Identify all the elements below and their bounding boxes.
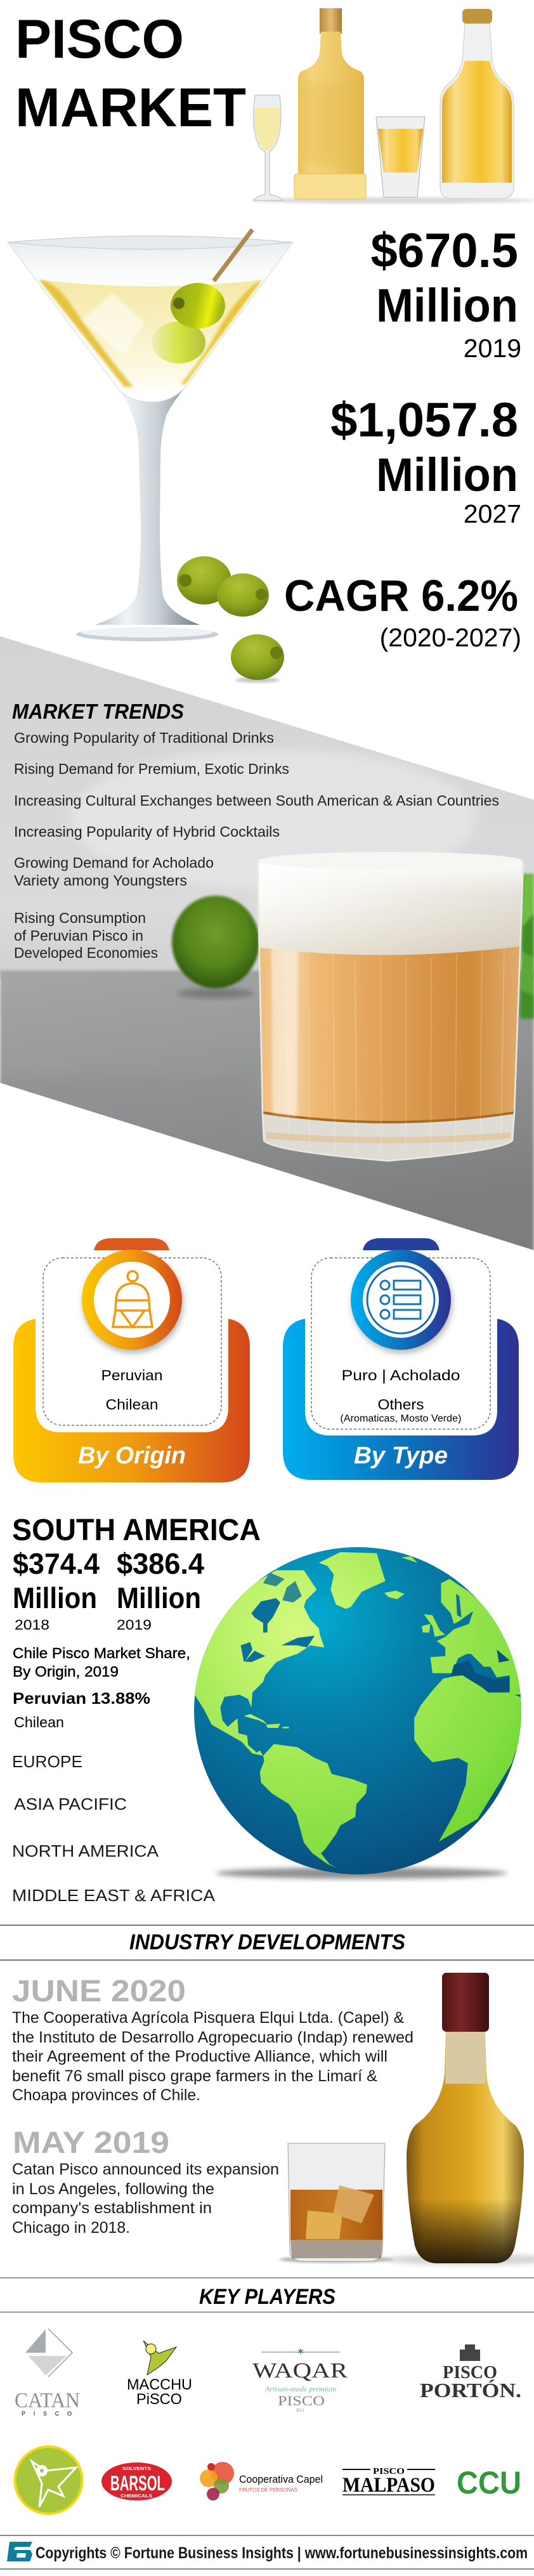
logo: Waqar Pisco: WAQAR — [252, 2359, 348, 2383]
text block: June 2020: JUNE 2020 — [12, 1975, 186, 2008]
logo: Catan Pisco: PISCO — [22, 2410, 72, 2417]
text block: May 2019: company's establishment in — [12, 2199, 212, 2217]
title: PISCO — [15, 9, 184, 70]
list: other regions: MIDDLE EAST & AFRICA — [12, 1886, 216, 1905]
list: market trends: Increasing Cultural Exchanges between South American & Asian Countries — [14, 792, 499, 809]
stat: market size 2027: Million — [376, 448, 518, 501]
stat: south america 2018: $374.4 — [13, 1547, 100, 1580]
icon: square tequila bottle — [294, 8, 366, 199]
logo: Macchu Pisco — [127, 2341, 192, 2408]
icon: green leaves — [520, 874, 534, 1019]
text: origin segments: Peruvian — [101, 1367, 162, 1383]
text block: June 2020: Choapa provinces of Chile. — [12, 2086, 200, 2104]
logo: Cooperativa Capel — [200, 2462, 323, 2501]
panel: market trends photo band — [0, 636, 534, 1253]
text: origin segments — [101, 1367, 162, 1413]
stat: south america 2019: 2019 — [117, 1617, 152, 1633]
text: chile market share: Chilean — [14, 1714, 64, 1730]
panel: by origin — [13, 1238, 250, 1482]
logo: Waqar Pisco: ✶ — [296, 2346, 305, 2358]
list: other regions: ASIA PACIFIC — [14, 1795, 127, 1814]
list: other regions — [12, 1752, 216, 1905]
logo: Barsol: SOLVENTS — [122, 2467, 151, 2471]
icon: whisky glass — [279, 2143, 393, 2263]
list: market trends: Variety among Youngsters — [14, 872, 187, 889]
list: market trends: Developed Economies — [14, 945, 158, 961]
stat: market size 2027: $1,057.8 — [330, 393, 518, 447]
logo: Cooperativa Capel: FRUTOS DE PERSONAS — [239, 2487, 297, 2493]
text block: June 2020: their Agreement of the Productive Alliance, which will — [12, 2048, 387, 2065]
logo: Pisco Porton — [420, 2344, 521, 2402]
icon: olive in glass — [171, 283, 225, 329]
text block: June 2020: benefit 76 small pisco grape farmers in the Limarí & — [12, 2067, 377, 2085]
logo: Catan Pisco: CATAN — [15, 2389, 80, 2412]
stat: market size 2019: 2019 — [464, 334, 521, 363]
logo: Barsol: CHEMICALS — [120, 2494, 152, 2499]
stat: market size 2019 — [371, 224, 521, 363]
logo: Pisco Porton: PORTÓN. — [420, 2379, 521, 2402]
stat: south america 2018 — [13, 1547, 100, 1633]
stat: market size 2027 — [330, 393, 521, 528]
stat: CAGR: (2020-2027) — [380, 623, 521, 652]
label: by type: By Type — [354, 1442, 448, 1469]
icon: champagne flute — [254, 95, 283, 200]
text block: May 2019 — [12, 2126, 279, 2237]
logo: Catan Pisco — [15, 2329, 80, 2417]
icon: olives on table — [177, 556, 284, 683]
logo: Waqar Pisco: PISCO — [278, 2393, 325, 2409]
logo: Cooperativa Capel: Cooperativa Capel — [239, 2473, 323, 2485]
icon: round bottle — [440, 9, 514, 199]
title: MARKET — [15, 77, 246, 138]
logo: Macchu Pisco: MACCHU — [127, 2376, 192, 2393]
list: market trends: Growing Demand for Acholado — [14, 854, 214, 871]
logo: Waqar Pisco: D.O. — [296, 2408, 305, 2413]
text: chile market share: By Origin, 2019 — [13, 1663, 119, 1680]
stat: market size 2027: 2027 — [464, 499, 521, 528]
label: by origin: By Origin — [78, 1442, 186, 1469]
logo: bird emblem — [15, 2447, 82, 2514]
logo: Barsol — [101, 2462, 172, 2501]
stat: CAGR: CAGR 6.2% — [284, 571, 518, 620]
illustration: bottles and glasses — [251, 8, 534, 204]
logo: Pisco Malpaso: MALPASO — [342, 2474, 435, 2497]
heading: key players: KEY PLAYERS — [199, 2285, 335, 2309]
icon: whisky bottle — [387, 1973, 534, 2265]
footer — [0, 2535, 534, 2569]
logo: Macchu Pisco: PiSCO — [136, 2391, 182, 2408]
stat: market size 2019: $670.5 — [371, 224, 518, 278]
logo: Pisco Porton: PISCO — [443, 2363, 497, 2383]
logo: Pisco Malpaso: PISCO — [373, 2467, 405, 2476]
list: market trends: of Peruvian Pisco in — [14, 927, 143, 944]
list: market trends: Rising Consumption — [14, 910, 146, 926]
stat: market size 2019: Million — [376, 279, 518, 332]
logo: Barsol: BARSOL — [110, 2471, 165, 2495]
heading: market trends: MARKET TRENDS — [12, 700, 184, 723]
list: other regions: NORTH AMERICA — [12, 1841, 159, 1860]
icon: shot glass — [376, 117, 425, 197]
text: chile market share — [13, 1645, 190, 1730]
illustration: globe — [194, 1547, 524, 1879]
stat: south america 2019: Million — [117, 1581, 201, 1614]
icon: blurred lime — [172, 896, 259, 998]
icon: olive submerged — [152, 322, 205, 363]
text: type segments — [340, 1367, 462, 1424]
icon: origin badge — [82, 1250, 182, 1350]
logo: Waqar Pisco: Artisan-made premium — [264, 2384, 336, 2393]
icon: pisco sour glass — [257, 852, 523, 1161]
icon: Fortune Business Insights logo — [7, 2542, 32, 2561]
text block: May 2019: in Los Angeles, following the — [12, 2180, 214, 2198]
heading: south america: SOUTH AMERICA — [12, 1514, 261, 1547]
title — [15, 9, 246, 138]
list: market trends: Increasing Popularity of Hybrid Cocktails — [14, 823, 280, 840]
stat: CAGR — [284, 571, 521, 652]
heading: industry developments: INDUSTRY DEVELOPMENTS — [129, 1930, 405, 1954]
logo: CCU: CCU — [457, 2465, 521, 2501]
text block: May 2019: Catan Pisco announced its expansion — [12, 2161, 279, 2178]
text block: June 2020: the Instituto de Desarrollo Agropecuario (Indap) renewed — [12, 2029, 414, 2046]
icon: cocktail pick — [214, 230, 252, 281]
text block: June 2020: The Cooperativa Agrícola Pisquera Elqui Ltda. (Capel) & — [12, 2009, 404, 2027]
text block: May 2019: Chicago in 2018. — [12, 2219, 130, 2237]
text: origin segments: Chilean — [105, 1396, 159, 1413]
text block: June 2020 — [12, 1975, 414, 2104]
stat: south america 2018: 2018 — [15, 1617, 49, 1633]
list: market trends — [14, 729, 499, 961]
panel: by type — [283, 1238, 519, 1480]
stat: south america 2019 — [117, 1547, 204, 1633]
list: other regions: EUROPE — [12, 1752, 82, 1771]
text: chile market share: Peruvian 13.88% — [13, 1690, 150, 1708]
text: chile market share: Chile Pisco Market Share, — [13, 1645, 190, 1661]
stat: south america 2019: $386.4 — [117, 1547, 204, 1580]
logo: Waqar Pisco — [252, 2346, 348, 2413]
text block: May 2019: MAY 2019 — [13, 2126, 169, 2160]
list: market trends: Growing Popularity of Traditional Drinks — [14, 729, 274, 746]
text: type segments: (Aromaticas, Mosto Verde) — [340, 1413, 462, 1424]
icon: type badge — [351, 1250, 451, 1350]
stat: south america 2018: Million — [13, 1581, 97, 1614]
text: type segments: Others — [378, 1396, 424, 1413]
illustration: martini glass — [8, 230, 293, 641]
list: market trends: Rising Demand for Premium, Exotic Drinks — [14, 761, 289, 777]
text: type segments: Puro | Acholado — [341, 1367, 460, 1383]
